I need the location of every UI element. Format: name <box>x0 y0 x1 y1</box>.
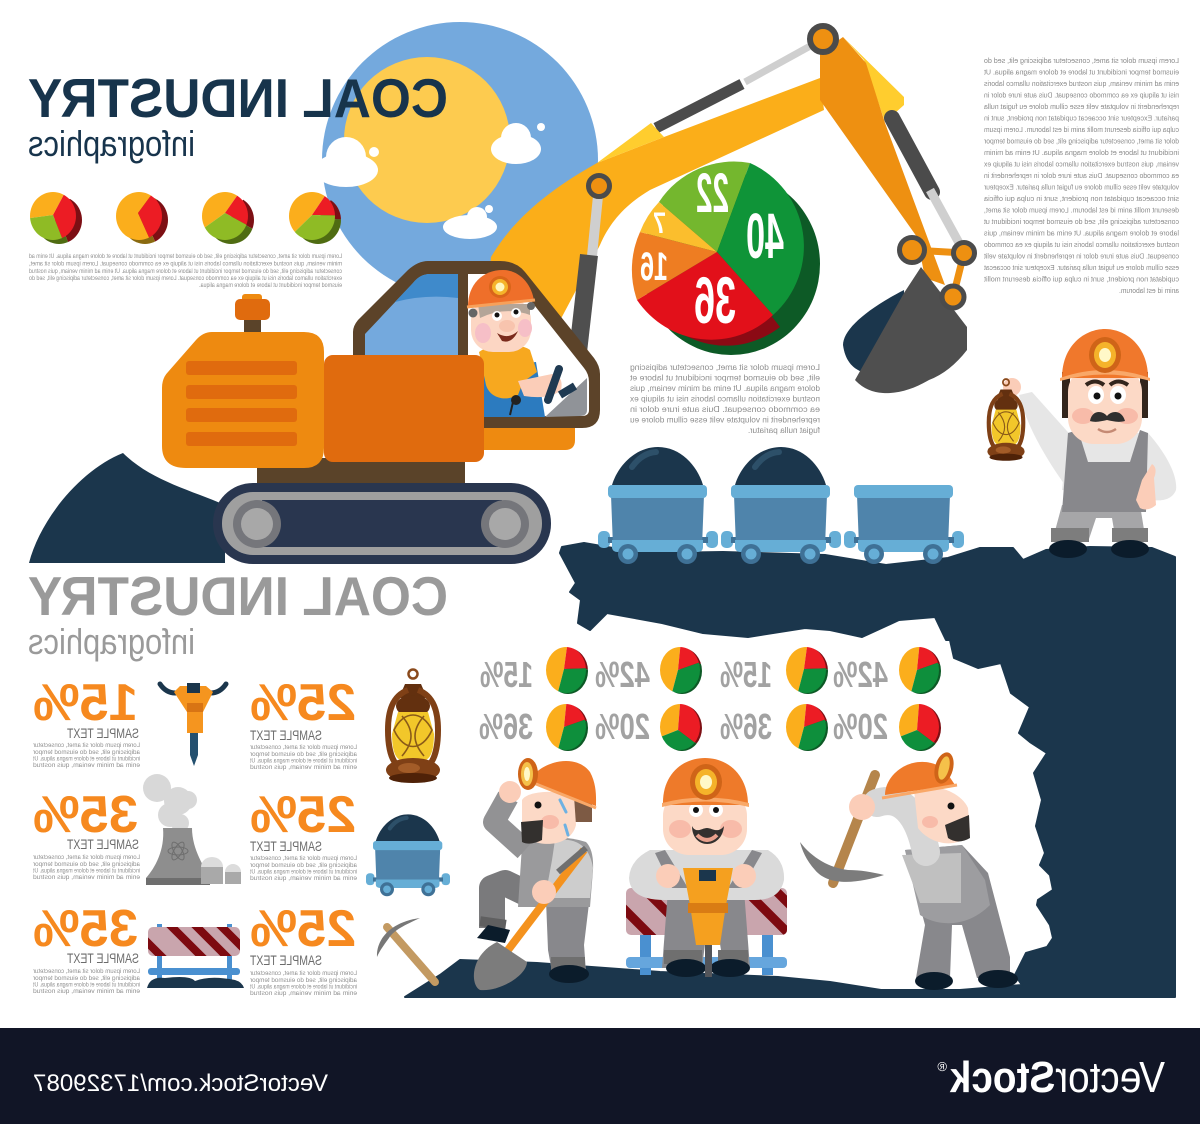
stat block: 35% row 3: incididunt ut labore et dolore magna aliqua. Ut <box>33 982 140 988</box>
stat block: 25% row 2: enim ad minim veniam, quis nostrud <box>250 876 357 882</box>
stat block: 15%: Lorem ipsum dolor sit amet, consectetur <box>33 743 140 749</box>
stat block: 35% row 2: 35% <box>33 786 138 844</box>
stat block: 35% row 3: 35% <box>33 900 138 958</box>
small pie and percent row 2: 36% <box>479 706 533 747</box>
stat block: 25% row 2 <box>250 786 357 882</box>
second title: COAL INDUSTRY <box>28 565 448 627</box>
right paragraph: Lorem ipsum dolor sit amet, consectetur adipiscing elit, sed do <box>984 56 1179 65</box>
stat block: 35% row 2: incididunt ut labore et dolore magna aliqua. Ut <box>33 868 140 874</box>
icon: hand lantern <box>987 379 1025 461</box>
main pie chart: 16 <box>640 245 668 289</box>
title: infographics <box>28 123 195 164</box>
right paragraph: labore et dolore magna aliqua. Ut enim ad minim veniam, quis <box>984 228 1179 238</box>
crawler track <box>213 483 551 564</box>
miner with jackhammer <box>626 758 787 977</box>
right paragraph: veniam, quis nostrud exercitation ullamco laboris nisi ut aliquip ex <box>984 160 1179 168</box>
right paragraph: cupidatat non proident, sunt in culpa qui officia deserunt mollit <box>984 274 1179 284</box>
main pie chart <box>632 161 820 355</box>
footer bar <box>0 1028 1200 1124</box>
stat block: 25% row 1 <box>250 674 357 771</box>
small pie and percent row 1 <box>480 610 981 739</box>
main pie chart: 36 <box>694 263 736 337</box>
second title: infographics <box>28 621 195 662</box>
coal pile behind excavator <box>29 453 225 563</box>
stat block: 25% row 1: SAMPLE TEXT <box>250 727 322 743</box>
small pie charts row <box>30 192 341 244</box>
right paragraph: consequat. Duis aute irure dolor in reprehenderit in voluptate velit <box>984 252 1179 260</box>
stat block: 25% row 2: Lorem ipsum dolor sit amet, consectetur <box>250 856 357 862</box>
small pie and percent row 1: 15% <box>720 654 772 695</box>
driver <box>467 270 575 417</box>
excavator body <box>162 261 600 564</box>
small pie and percent row 2: 20% <box>595 706 650 747</box>
miner with pick <box>800 750 1018 990</box>
stat block: 35% row 3: adipiscing elit, sed do eiusmod tempor <box>33 976 140 982</box>
small pie and percent row 1: 15% <box>480 654 533 695</box>
stat block: 35% row 2: Lorem ipsum dolor sit amet, consectetur <box>33 855 140 861</box>
stat block: 25% row 2: 25% <box>250 786 356 844</box>
intro paragraph: exercitation ullamco laboris nisi ut aliquip ex ea commodo consequat. Lorem ipsum dolor sit amet, consectetur adipiscing elit, sed do <box>28 276 342 282</box>
stat block: 15%: adipiscing elit, sed do eiusmod tempor <box>33 750 140 756</box>
stat block: 35% row 3: enim ad minim veniam, quis nostrud <box>33 989 140 995</box>
small pie and percent row 2: 36% <box>720 706 772 747</box>
stat block: 25% row 2: SAMPLE TEXT <box>250 838 322 854</box>
stat block: 25% row 1: Lorem ipsum dolor sit amet, consectetur <box>250 745 357 751</box>
intro paragraph: eiusmod tempor incididunt ut labore et dolore magna aliqua. <box>199 283 342 289</box>
right paragraph: culpa qui officia deserunt mollit anim id est laborum. Lorem ipsum <box>984 125 1179 134</box>
main pie chart: 22 <box>696 161 729 224</box>
stat block: 25% row 3 <box>250 900 357 997</box>
right paragraph: anim id est laborum. <box>1119 286 1179 295</box>
cab <box>353 261 600 428</box>
right paragraph: enim ad minim veniam, quis nostrud exercitation ullamco laboris <box>984 79 1179 88</box>
stat block: 15%: 15% <box>33 674 138 732</box>
stat block: 25% row 3: SAMPLE TEXT <box>250 952 322 968</box>
right paragraph: voluptate velit esse cillum dolore eu fugiat nulla pariatur. Excepteur <box>984 182 1179 192</box>
stat block: 35% row 2: SAMPLE TEXT <box>67 836 139 852</box>
stat block: 35% row 2: adipiscing elit, sed do eiusmod tempor <box>33 862 140 868</box>
middle paragraph: ea commodo consequat. Duis aute irure dolor in <box>630 405 820 414</box>
stat block: 25% row 1: enim ad minim veniam, quis nostrud <box>250 765 357 771</box>
right paragraph: reprehenderit in voluptate velit esse cillum dolore eu fugiat nulla <box>983 102 1179 111</box>
right paragraph <box>983 56 1179 295</box>
stat block: 15%: enim ad minim veniam, quis nostrud <box>33 763 140 769</box>
sky circle with sun and clouds <box>314 22 598 298</box>
stat block: 15%: incididunt ut labore et dolore magna aliqua. Ut <box>33 756 140 762</box>
small pie and percent row 2: 20% <box>833 706 888 747</box>
icon: road barrier <box>147 924 244 988</box>
second title <box>28 565 448 662</box>
right paragraph: nisi ut aliquip ex ea commodo consequat. Duis aute irure dolor in <box>984 90 1179 100</box>
stat block: 25% row 1: 25% <box>250 674 356 732</box>
miner with lantern <box>1003 329 1176 558</box>
middle paragraph: reprehenderit in voluptate velit esse cillum dolore eu <box>630 416 820 424</box>
stat block: 35% row 2 <box>33 786 140 881</box>
right paragraph: pariatur. Excepteur sint occaecat cupidatat non proident, sunt in <box>984 114 1179 122</box>
footer bar: ® <box>937 1059 947 1074</box>
small pie and percent row 1: 42% <box>833 654 888 695</box>
stat block: 15%: SAMPLE TEXT <box>67 725 139 741</box>
right paragraph: ea commodo consequat. Duis aute irure dolor in reprehenderit in <box>984 171 1179 180</box>
intro paragraph <box>28 254 342 289</box>
stat block: 25% row 3: 25% <box>250 900 356 958</box>
small pie and percent row 2 <box>479 667 981 796</box>
middle paragraph: nostrud exercitation ullamco laboris nisi ut aliquip ex <box>630 394 820 404</box>
stat block: 25% row 3: incididunt ut labore et dolore magna aliqua. Ut <box>250 984 357 990</box>
middle paragraph: Lorem ipsum dolor sit amet, consectetur adipiscing <box>630 363 820 372</box>
icon: jackhammer <box>160 683 226 766</box>
icon: pick <box>377 918 435 982</box>
icon: coal cart <box>366 814 450 896</box>
intro paragraph: minim veniam, quis nostrud exercitation ullamco laboris nisi ut aliquip ex ea commodo consequat. Lorem ipsum dolor sit amet, <box>29 262 342 268</box>
stat block: 25% row 3: Lorem ipsum dolor sit amet, consectetur <box>250 971 357 977</box>
right paragraph: dolor sit amet, consectetur adipiscing elit, sed do eiusmod tempor <box>984 136 1179 146</box>
stat block: 25% row 1: adipiscing elit, sed do eiusmod tempor <box>250 752 357 758</box>
footer bar: VectorStock.com/17329087 <box>33 1070 328 1097</box>
stat block: 25% row 2: adipiscing elit, sed do eiusmod tempor <box>250 863 357 869</box>
right paragraph: eiusmod tempor incididunt ut labore et dolore magna aliqua. Ut <box>984 68 1179 76</box>
stat block: 15% <box>33 674 140 769</box>
title: COAL INDUSTRY <box>28 67 448 129</box>
miner with shovel <box>474 758 596 990</box>
middle paragraph: elit, sed do eiusmod tempor incididunt ut labore et <box>629 374 820 382</box>
stat block: 35% row 2: enim ad minim veniam, quis nostrud <box>33 875 140 881</box>
stat block: 35% row 3: Lorem ipsum dolor sit amet, consectetur <box>33 969 140 975</box>
main pie chart: 40 <box>746 200 784 272</box>
right paragraph: nostrud exercitation ullamco laboris nisi ut aliquip ex ea commodo <box>984 240 1179 249</box>
stat block: 25% row 3: adipiscing elit, sed do eiusmod tempor <box>250 978 357 984</box>
right paragraph: sint occaecat cupidatat non proident, sunt in culpa qui officia <box>983 194 1179 203</box>
excavator arm <box>484 26 974 393</box>
stat block: 25% row 1: incididunt ut labore et dolore magna aliqua. Ut <box>250 758 357 764</box>
footer bar: VectorStock <box>949 1052 1165 1102</box>
right paragraph: esse cillum dolore eu fugiat nulla pariatur. Excepteur sint occaecat <box>984 263 1179 272</box>
stat block: 25% row 3: enim ad minim veniam, quis nostrud <box>250 991 357 997</box>
small pie and percent row 1: 42% <box>595 654 650 695</box>
middle paragraph: dolore magna aliqua. Ut enim ad minim veniam, quis <box>630 384 820 393</box>
middle paragraph <box>629 363 820 435</box>
coal carts on ledge <box>598 447 964 564</box>
middle paragraph: fugiat nulla pariatur. <box>748 426 820 435</box>
cave ground <box>405 543 1175 997</box>
right paragraph: deserunt mollit anim id est laborum. Lorem ipsum dolor sit amet, <box>984 206 1179 214</box>
stat block: 35% row 3 <box>33 900 140 995</box>
title <box>28 67 448 164</box>
right paragraph: consectetur adipiscing elit, sed do eiusmod tempor incididunt ut <box>984 217 1179 226</box>
icon: cooling tower <box>143 774 241 885</box>
main pie chart: 7 <box>653 207 666 240</box>
icon: lantern <box>386 670 440 783</box>
right paragraph: incididunt ut labore et dolore magna aliqua. Ut enim ad minim <box>984 148 1179 157</box>
stat block: 25% row 2: incididunt ut labore et dolore magna aliqua. Ut <box>250 870 357 876</box>
stat block: 35% row 3: SAMPLE TEXT <box>67 950 139 966</box>
